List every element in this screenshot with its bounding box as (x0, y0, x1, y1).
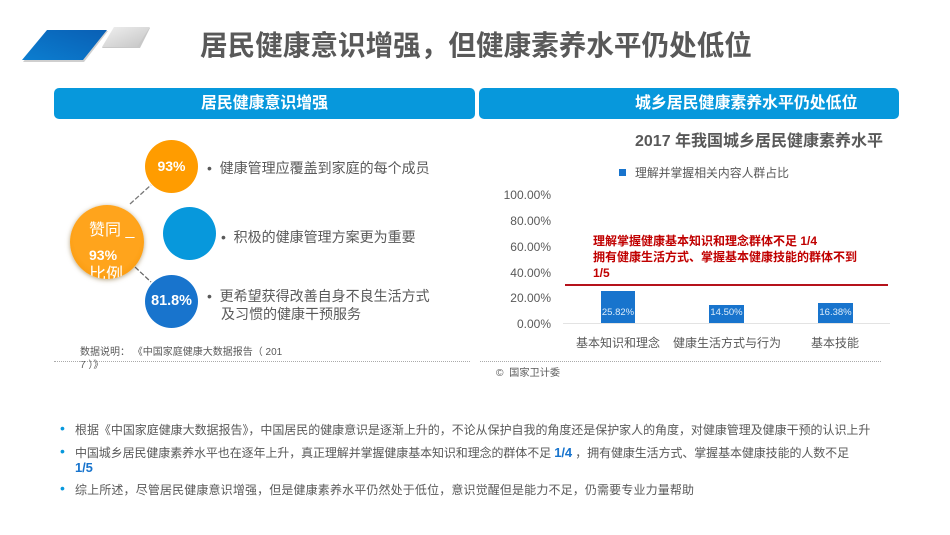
bar: 16.38% (818, 303, 853, 323)
bullet 2 (60, 443, 849, 474)
data source note (80, 346, 282, 370)
circle: 93%: 93% (157, 158, 186, 174)
circle: 93% (145, 140, 198, 193)
bar: 25.82% (601, 291, 635, 323)
source credit: © 国家卫计委 (496, 368, 560, 379)
data source note: 数据说明： 《中国家庭健康大数据报告（ 201 (80, 347, 282, 358)
title: 居民健康意识增强，但健康素养水平仍处低位 (200, 30, 752, 60)
bullet 2: 中国城乡居民健康素养水平也在逐年上升，真正理解并掌握健康基本知识和理念的群体不足 1/4 ，拥有健康生活方式、掌握基本健康技能的人数不足 (75, 445, 849, 460)
text: item 2: • 积极的健康管理方案更为重要 (221, 229, 416, 245)
chart baseline (563, 323, 890, 324)
chart callout text: 拥有健康生活方式、掌握基本健康技能的群体不到 (593, 250, 857, 264)
chart callout text (593, 234, 857, 280)
circle: central agree ratio: 赞同 _ (89, 222, 134, 239)
circle: 81.8% (145, 275, 198, 328)
bottom summary: • (60, 420, 65, 436)
text: item 3 (207, 288, 430, 322)
chart axis labels: 20.00% (510, 291, 551, 305)
bullet 3: 综上所述，尽管居民健康意识增强，但是健康素养水平仍然处于低位，意识觉醒但是能力不足，仍需要专业力量帮助 (75, 483, 694, 497)
chart title: 2017 年我国城乡居民健康素养水平 (635, 133, 883, 150)
category label: 基本知识和理念: 基本知识和理念 (576, 336, 660, 350)
right panel heading (479, 88, 899, 119)
bottom summary (60, 420, 870, 497)
category label: 基本技能: 基本技能 (811, 336, 859, 350)
chart axis labels: 60.00% (510, 240, 551, 254)
data source note: 7 ）》 (80, 360, 103, 370)
right panel heading: 城乡居民健康素养水平仍处低位 (635, 95, 857, 112)
chart callout text: 1/5 (593, 266, 610, 280)
text: item 3: • 更希望获得改善自身不良生活方式 (207, 288, 430, 304)
bar: 16.38%: 16.38% (819, 307, 852, 318)
bullet 1: 根据《中国家庭健康大数据报告》，中国居民的健康意识是逐渐上升的，不论从保护自我的角度还是保护家人的角度，对健康管理及健康干预的认识上升 (75, 423, 870, 437)
text: item 3: 及习惯的健康干预服务 (221, 306, 361, 322)
chart legend: 理解并掌握相关内容人群占比 (635, 166, 789, 180)
chart axis labels: 40.00% (510, 266, 551, 280)
chart axis labels: 80.00% (510, 214, 551, 228)
chart axis labels: 100.00% (504, 188, 551, 202)
left panel heading: 居民健康意识增强 (201, 95, 328, 112)
circle: central agree ratio: 93% (89, 247, 117, 263)
connector lines (130, 184, 152, 282)
bottom summary: • (60, 480, 65, 496)
bottom summary: • (60, 443, 65, 459)
dotted dividers (54, 361, 470, 362)
bar: 14.50%: 14.50% (710, 307, 743, 318)
bar: 14.50% (709, 305, 744, 323)
left panel heading (54, 88, 475, 119)
bullet 2: 1/5 (75, 460, 93, 474)
red threshold line (565, 284, 888, 286)
logo: parallelograms (22, 27, 150, 62)
chart axis labels (504, 188, 551, 331)
circle: blue empty (163, 207, 216, 260)
text: item 1: • 健康管理应覆盖到家庭的每个成员 (207, 160, 430, 176)
circle: central agree ratio (70, 205, 144, 279)
chart callout text: 理解掌握健康基本知识和理念群体不足 1/4 (593, 234, 817, 248)
category label: 健康生活方式与行为: 健康生活方式与行为 (673, 336, 781, 350)
circle: 81.8%: 81.8% (151, 293, 192, 309)
chart axis labels: 0.00% (517, 317, 551, 331)
bar: 25.82%: 25.82% (602, 307, 634, 318)
